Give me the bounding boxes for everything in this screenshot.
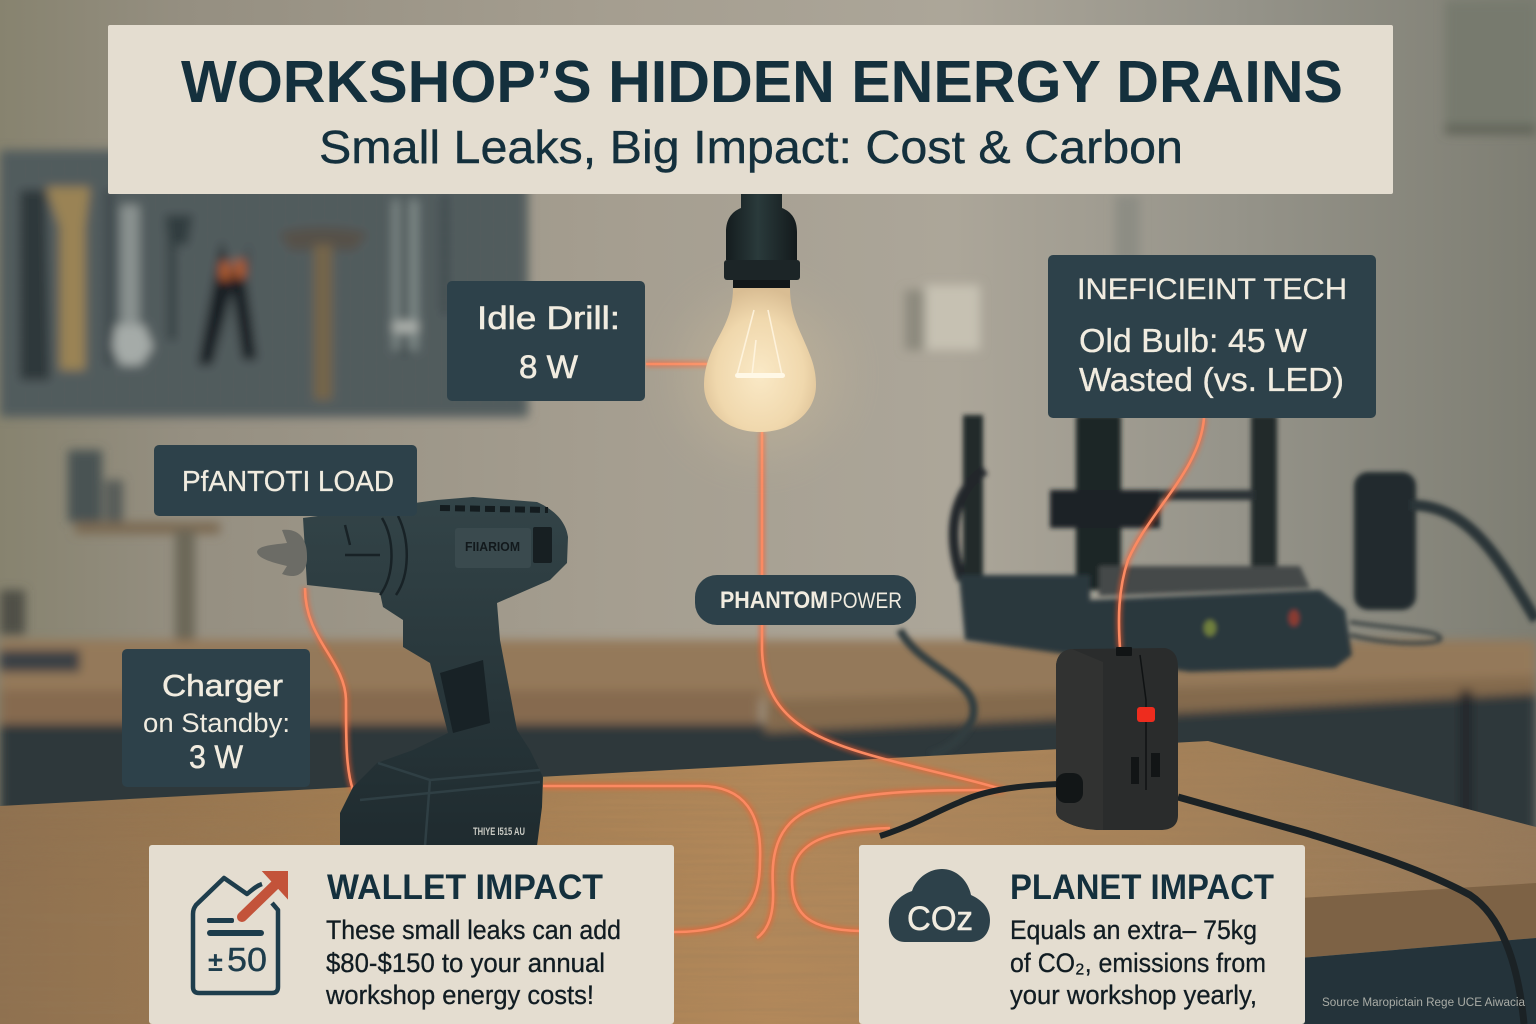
battery label: THIYE I515 AU [473,826,525,838]
drill label: FIIARIOM [465,539,520,554]
body text: Equals an extra– 75kg [1010,915,1257,945]
label: charger on standby: on Standby: [143,708,290,738]
heading: WALLET IMPACT [327,868,603,907]
icon: CO2 cloud: COz [907,900,973,938]
title banner [108,25,1393,194]
label: phantom load [154,445,417,516]
pill label: phantom power: POWER [830,588,902,613]
chuck cone and tip [257,530,307,576]
icon: price tag house with rising arrow: 50 [227,941,267,978]
source note: Source Maropictain Rege UCE Aiwacia [1322,997,1526,1009]
rear benches [0,640,1536,700]
panel: planet impact [859,845,1305,1024]
3D printer [963,415,983,585]
body text: workshop energy costs! [325,980,594,1010]
pill label: phantom power: PHANTOM [720,587,828,614]
foreground wooden table [0,740,1536,1024]
icon: price tag house with rising arrow: ± [208,947,223,977]
body text: These small leaks can add [326,915,621,945]
cordless drill [257,497,568,846]
body text [325,915,621,1010]
icon: CO2 cloud [889,869,990,942]
panel: inefficient tech: Wasted (vs. LED) [1079,361,1344,398]
heading: PLANET IMPACT [1010,868,1274,907]
shelf left [75,522,220,534]
panel: inefficient tech: Old Bulb: 45 W [1079,322,1308,359]
body text: $80-$150 to your annual [326,948,605,978]
subtitle: Small Leaks, Big Impact: Cost & Carbon [319,121,1183,173]
orange energy wires [305,364,1204,938]
icon: price tag house with rising arrow [193,872,287,993]
power strip with cords [880,647,1524,1024]
pill label: phantom power [695,575,916,625]
panel: inefficient tech [1048,255,1376,418]
label: idle drill: 8 W [519,349,579,385]
panel: wallet impact [149,845,674,1024]
tools on pegboard [20,190,50,380]
label: phantom load: PfANTOTI LOAD [182,466,394,498]
label: charger on standby: Charger [162,668,283,703]
body text [1010,915,1266,1010]
label: charger on standby: 3 W [189,739,244,775]
label: idle drill: Idle Drill: [477,300,620,336]
label: charger on standby [122,649,310,787]
panel: inefficient tech: INEFICIEINT TECH [1077,273,1347,306]
label: idle drill [447,281,645,401]
title: WORKSHOP’S HIDDEN ENERGY DRAINS [181,49,1343,115]
drill silhouette [303,497,568,846]
body text: of CO₂, emissions from [1010,948,1266,978]
body text: your workshop yearly, [1010,980,1257,1010]
light bulb [680,194,840,455]
